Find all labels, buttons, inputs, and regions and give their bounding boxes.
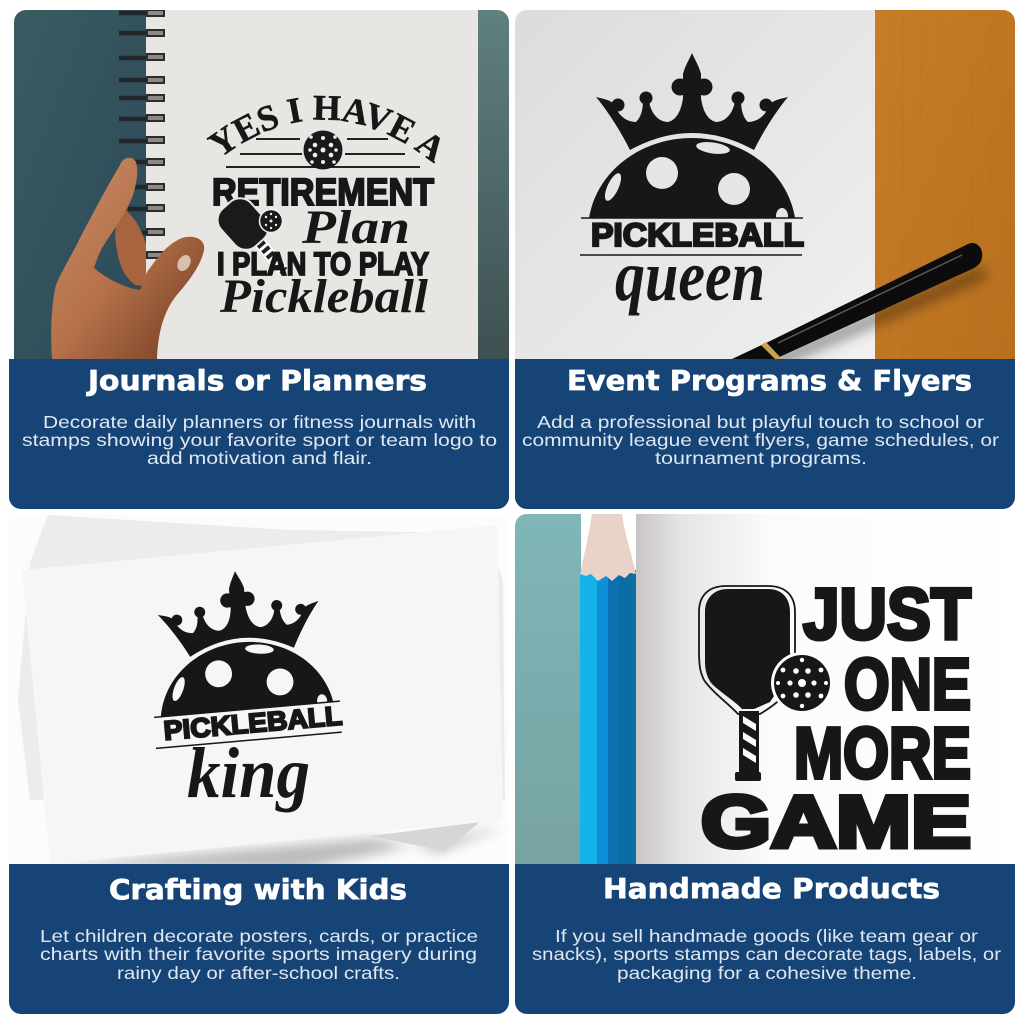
icon: blue pencil: [580, 514, 636, 864]
description: [40, 926, 478, 983]
stamp text: plan: Plan: [301, 201, 410, 254]
panel: handmade products: [515, 514, 1015, 1014]
description: If you sell handmade goods (like team gear or: [555, 926, 978, 946]
stamp text: pickleball: PICKLEBALL: [591, 217, 804, 253]
description: snacks), sports stamps can decorate tags, labels, or: [532, 944, 1001, 964]
photo: top card: [22, 525, 503, 864]
stamp text: more: MORE: [794, 714, 971, 794]
description: tournament programs.: [655, 448, 867, 468]
photo: paper on wood desk with pen: [515, 10, 1015, 368]
description: packaging for a cohesive theme.: [617, 963, 917, 983]
stamp: yes I have a retirement plan: [206, 96, 440, 323]
icon: half pickleball dome: [155, 635, 334, 722]
panel: journals or planners: [9, 10, 509, 509]
panel: event programs and flyers: [515, 10, 1015, 509]
photo: blue pencil on paper: [515, 514, 754, 864]
caption box: [9, 864, 509, 1014]
stamp: pickleball king: [141, 563, 343, 813]
speed lines: [226, 139, 420, 167]
icon: crown: [596, 53, 788, 150]
stamp text: pickleball: PICKLEBALL: [162, 701, 343, 746]
caption box: [515, 359, 1015, 509]
stamp arched heading: YES I HAVE A: [206, 96, 440, 164]
dividing rules: [153, 701, 343, 748]
description: Decorate daily planners or fitness journals with: [43, 412, 476, 432]
dividing rules: [580, 218, 803, 255]
stamp text: king: king: [187, 733, 310, 813]
icon: pickleball: [304, 130, 342, 170]
icon: hand holding the notebook: [51, 158, 204, 359]
icon: black pen: [732, 243, 985, 368]
icon: notebook spiral binding: [119, 10, 164, 258]
stamp text: game: GAME: [701, 782, 971, 863]
description: [522, 412, 999, 468]
description: charts with their favorite sports imagery during: [40, 944, 477, 964]
icon: crown: [155, 564, 322, 659]
description: rainy day or after-school crafts.: [117, 963, 400, 983]
description: add motivation and flair.: [147, 448, 372, 468]
description: stamps showing your favorite sport or team logo to: [22, 430, 497, 450]
stamp text: I plan to play: I PLAN TO PLAY: [217, 246, 429, 282]
panel: crafting with kids: [9, 514, 509, 1014]
heading: Crafting with Kids: [109, 873, 407, 906]
stamp text: one: ONE: [844, 645, 971, 725]
stamp: pickleball queen: [580, 53, 804, 316]
description: Add a professional but playful touch to school or: [537, 412, 984, 432]
icon: pickleball: [771, 652, 833, 714]
description: [532, 926, 1001, 983]
stamp text: queen: queen: [615, 236, 765, 316]
icon: half pickleball dome: [589, 138, 795, 224]
description: community league event flyers, game schedules, or: [522, 430, 999, 450]
stamp: just one more game: [699, 575, 971, 863]
heading: Journals or Planners: [86, 364, 427, 397]
heading: Event Programs & Flyers: [567, 364, 972, 397]
caption box: [9, 359, 509, 509]
stamp text: just: JUST: [803, 575, 971, 655]
icon: small paddle and ball: [211, 192, 284, 271]
caption box: [515, 864, 1015, 1014]
heading: Handmade Products: [603, 872, 940, 905]
description: [22, 412, 497, 468]
icon: pickleball paddle: [699, 586, 795, 781]
stamp text: retirement: RETIREMENT: [212, 172, 434, 214]
photo: stack of white cards: [9, 514, 509, 870]
stamp text: pickleball script: Pickleball: [219, 270, 429, 323]
photo: spiral notebook held by a hand: [14, 10, 509, 359]
description: Let children decorate posters, cards, or practice: [40, 926, 478, 946]
